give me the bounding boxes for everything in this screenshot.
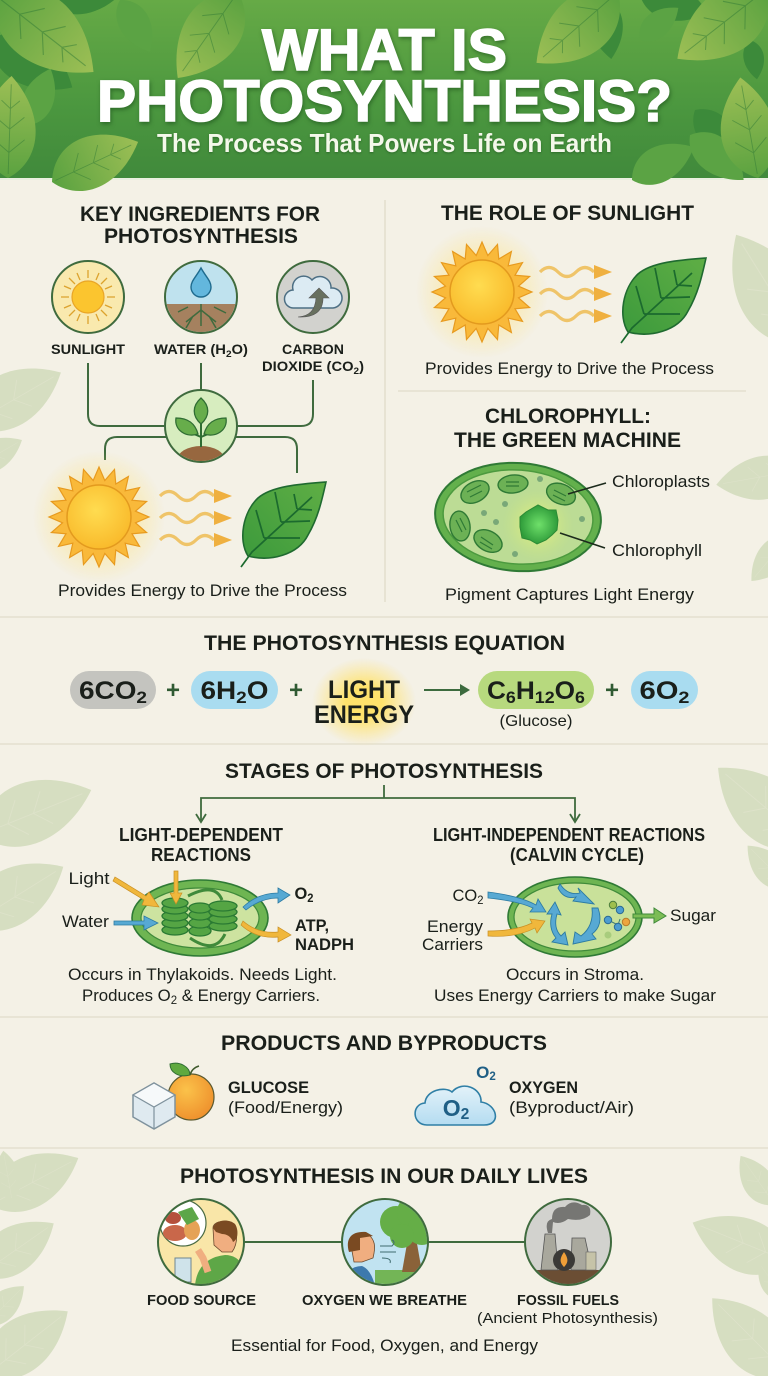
label: sunlight: SUNLIGHT [51,341,125,357]
heading: PRODUCTS AND BYPRODUCTS [221,1032,547,1055]
icon: oxygen cloud: O [476,1063,489,1082]
arrow: sugar out [633,908,666,923]
panel: chlorophyll [431,405,710,604]
icon: orange and sugar cube [133,1063,214,1129]
heading: STAGES OF PHOTOSYNTHESIS [225,760,543,783]
diagram: plant cell [431,457,605,577]
label: fossil fuels [477,1292,658,1327]
arrow: light in [113,871,182,907]
icon: fossil fuels [525,1199,611,1290]
description: light dependent: & Energy Carriers. [177,986,320,1005]
pill: 6CO2 [70,671,156,709]
panel: equation [70,632,698,746]
arrow: water in [114,916,158,930]
labels: calvin cycle: Sugar [670,906,716,925]
plus: + [605,677,619,704]
labels: light dependent: 2 [307,893,314,905]
labels: calvin cycle: CO [452,886,478,905]
header banner [0,0,768,204]
label: chlorophyll: Chlorophyll [612,541,702,560]
icon: sunlight [52,261,124,333]
title: WHAT IS [262,18,507,83]
label: oxygen we breathe: OXYGEN WE BREATHE [302,1292,467,1309]
arrow [424,684,470,696]
description: calvin cycle: Occurs in Stroma. [506,965,644,984]
label: water: O) [232,341,248,357]
label: fossil fuels: FOSSIL FUELS [517,1292,619,1309]
labels: light dependent: ATP, [295,916,329,935]
heading: THE GREEN MACHINE [454,429,681,452]
icon: sun [416,226,548,358]
icon: water [165,261,237,336]
heading: THE PHOTOSYNTHESIS EQUATION [204,632,565,655]
label: water: WATER (H [154,341,222,357]
title: PHOTOSYNTHESIS? [97,69,672,134]
pill: 6CO2: 6CO [79,677,130,705]
label: water: 2 [226,349,232,360]
heading: light dependent: REACTIONS [151,845,251,865]
icon: plant [165,390,237,474]
plus: + [289,677,303,704]
pill: glucose: 6 [575,688,585,707]
heading: key ingredients: KEY INGREDIENTS FOR [80,203,320,226]
connector [244,1241,525,1243]
label: oxygen [509,1078,634,1117]
pill: glucose: O [555,677,575,705]
panel: key ingredients [33,203,364,600]
heading [454,405,681,452]
icon: leaf [621,258,706,343]
label: oxygen: OXYGEN [509,1078,578,1097]
heading: CHLOROPHYLL: [485,405,651,428]
heading: light dependent: LIGHT-DEPENDENT [119,825,283,845]
label: carbon dioxide: ) [359,358,364,374]
panel: role of sunlight [416,202,714,378]
labels: light dependent: O [294,884,308,903]
caption: Pigment Captures Light Energy [445,585,695,604]
panel: daily lives [147,1165,658,1355]
branching arrows [196,785,580,822]
arrows: light rays [540,265,612,323]
icon: oxygen cloud: O [443,1095,461,1121]
labels: calvin cycle: Energy [427,917,484,936]
heading: THE ROLE OF SUNLIGHT [441,202,694,225]
diagram: thylakoids [113,871,291,956]
description: calvin cycle: Uses Energy Carriers to make Sugar [434,986,716,1005]
arrow: ATP out [241,921,291,942]
icon: food source [158,1199,248,1285]
heading: light independent: LIGHT-INDEPENDENT REACTIONS [433,825,705,845]
heading: key ingredients: PHOTOSYNTHESIS [104,225,298,248]
label: carbon dioxide: 2 [354,366,359,377]
pill: glucose: 6 [506,688,516,707]
icon: oxygen cloud: 2 [461,1106,470,1123]
icon: chlorophyll pigment [520,505,558,544]
icon: oxygen cloud: 2 [489,1071,496,1083]
heading: PHOTOSYNTHESIS IN OUR DAILY LIVES [180,1165,588,1188]
light energy glow [312,658,416,746]
labels: calvin cycle: 2 [477,895,484,907]
arrow: energy carriers in [488,919,545,936]
label: glucose [228,1078,343,1117]
label: carbon dioxide [262,341,364,377]
label: glucose: GLUCOSE [228,1078,309,1097]
heading: key ingredients [80,203,320,248]
description: calvin cycle [434,965,716,1005]
arrow: CO2 in [488,892,546,912]
labels: light dependent: NADPH [295,935,354,954]
pill: glucose [478,671,594,709]
title [97,18,672,134]
description: light dependent: 2 [171,995,177,1007]
pill: glucose: C [487,677,505,705]
label: glucose: (Glucose) [500,713,572,730]
labels: calvin cycle: Carriers [422,935,483,954]
pill: 6H2O: 6H [200,677,232,705]
pill: 6CO2: 2 [136,688,147,707]
labels: light dependent: Light [68,869,110,888]
plus: + [166,677,180,704]
label: light energy: ENERGY [314,701,414,729]
arrow: oxygen out [243,888,290,910]
connector lines [88,363,313,473]
labels: light dependent: Water [62,912,109,931]
pill: glucose: 12 [535,688,555,707]
arrows: light rays [160,489,232,547]
pill: 6O2 [631,671,698,709]
diagram: calvin cycle [488,877,666,957]
heading: light dependent [119,825,283,865]
description: light dependent: Produces O [82,986,172,1005]
heading: light independent [433,825,705,865]
pill: glucose: H [516,677,535,705]
label: oxygen: (Byproduct/Air) [509,1098,634,1117]
description: light dependent [68,965,337,1007]
pill: 6O2: 6O [640,677,673,705]
label: carbon dioxide: DIOXIDE (CO [262,358,349,374]
label: light energy: LIGHT [328,676,400,704]
pill: 6H2O: 2 [236,688,247,707]
icon: carbon dioxide [277,261,349,333]
icon: leaf [241,482,326,567]
caption: Provides Energy to Drive the Process [425,359,714,378]
icon: sun [33,451,165,583]
pill: 6H2O: O [247,677,268,705]
section dividers [0,200,768,1148]
caption: Essential for Food, Oxygen, and Energy [231,1336,538,1355]
panel: products [133,1032,634,1129]
heading: light independent: (CALVIN CYCLE) [510,845,644,865]
labels: calvin cycle [422,886,716,954]
icon: oxygen cloud [415,1063,496,1125]
label: carbon dioxide: CARBON [282,341,344,357]
icon: oxygen we breathe [341,1198,429,1286]
panel: stages [62,760,716,1007]
pill: 6H2O [191,671,278,709]
caption: Provides Energy to Drive the Process [58,581,347,600]
description: light dependent: Occurs in Thylakoids. Needs Light. [68,965,337,984]
labels: light dependent [62,869,354,954]
pointer lines [560,483,606,548]
label: fossil fuels: (Ancient Photosynthesis) [477,1310,658,1327]
label: glucose: (Food/Energy) [228,1098,343,1117]
label: light energy [314,676,414,729]
subtitle: The Process That Powers Life on Earth [157,128,612,158]
pill: 6O2: 2 [678,688,690,707]
label: chloroplasts: Chloroplasts [612,472,710,491]
label: food source: FOOD SOURCE [147,1292,256,1309]
